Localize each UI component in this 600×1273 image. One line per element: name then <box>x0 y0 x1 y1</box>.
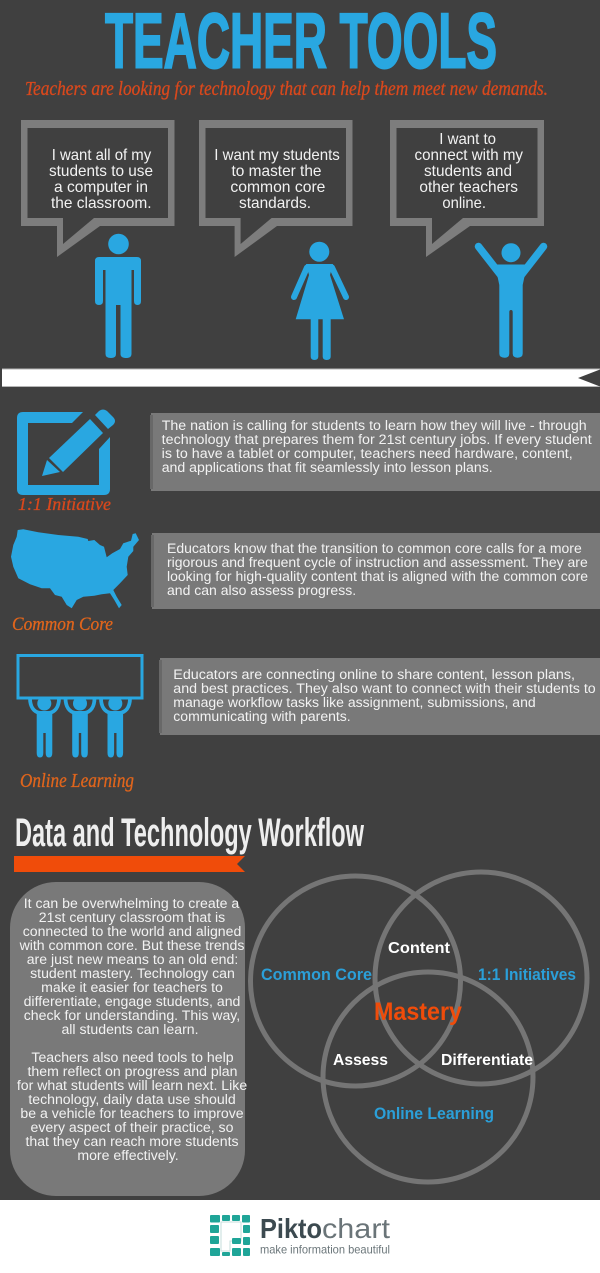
text panel: communicating with parents. <box>173 709 351 725</box>
text panel: looking for high-quality content that is aligned with the common core <box>167 568 588 584</box>
white ribbon divider <box>2 368 600 387</box>
panel: workflow text: with common core. But these trends <box>19 937 244 953</box>
speech bubble 3: other teachers <box>419 179 518 196</box>
panel: online learning <box>18 656 600 792</box>
panel: workflow text: connected to the world and aligned <box>23 923 241 939</box>
speech bubble 1: I want all of my <box>52 147 151 164</box>
text panel: Educators know that the transition to common core calls for a more <box>167 540 582 556</box>
text panel: The nation is calling for students to learn how they will live - through <box>162 418 587 434</box>
venn label: common core: Common Core <box>261 965 372 984</box>
speech bubble 2 <box>199 120 352 257</box>
text panel: and can also assess progress. <box>167 582 356 598</box>
section heading: Data and Technology Workflow <box>15 811 365 855</box>
panel: workflow text: them reflect on progress and plan <box>28 1063 237 1079</box>
label: Online Learning <box>20 770 134 792</box>
label: Common Core <box>12 614 113 635</box>
text panel <box>159 658 600 735</box>
panel: workflow text: every aspect of their practice, so <box>31 1119 234 1135</box>
icon: map of the United States <box>11 529 139 608</box>
text panel: technology that prepares them for 21st century jobs. If every student <box>162 432 592 448</box>
icon: three people holding a board <box>18 656 142 758</box>
panel: workflow text: check for understanding. This way, <box>24 1007 240 1023</box>
text panel: Educators are connecting online to share content, lesson plans, <box>173 667 575 683</box>
orange ribbon <box>14 856 245 872</box>
text panel: rigorous and frequent cycle of instruction and assessment. They are <box>167 554 588 570</box>
speech bubble 3: students and <box>424 163 512 180</box>
icon: man <box>95 234 141 358</box>
text panel: manage workflow tasks like assignment, submissions, and <box>173 695 536 711</box>
wordmark: Pikto <box>260 1213 322 1244</box>
icon: person with raised arms <box>478 243 544 358</box>
panel: 1:1 initiative <box>17 410 600 514</box>
venn label: differentiate: Differentiate <box>441 1052 533 1069</box>
wordmark: chart <box>322 1213 390 1244</box>
speech bubble 2: to master the <box>232 163 322 180</box>
speech bubble 2: standards. <box>239 195 311 212</box>
venn label: mastery: Mastery <box>374 998 462 1026</box>
speech bubble 3: online. <box>442 195 486 212</box>
panel: workflow text: be a vehicle for teachers to improve <box>20 1105 244 1121</box>
icon: pencil and pad <box>17 410 115 495</box>
panel: common core <box>11 529 600 635</box>
panel: workflow text: more effectively. <box>77 1147 179 1163</box>
speech bubble 1: a computer in <box>54 179 148 196</box>
panel: workflow text: make it easier for teachers to <box>41 979 223 995</box>
panel: workflow text: for what students will learn next. Like <box>17 1077 247 1093</box>
icon: woman <box>294 242 346 360</box>
panel: workflow text: student mastery. Technology can <box>30 965 235 981</box>
venn label: assess: Assess <box>333 1052 388 1069</box>
venn label: content: Content <box>388 940 451 957</box>
panel: workflow text: 21st century classroom that is <box>39 909 225 925</box>
panel: teacher quotes <box>21 120 544 360</box>
text panel <box>151 533 600 609</box>
speech bubble 1: students to use <box>49 163 153 180</box>
panel: workflow text: all students can learn. <box>61 1021 199 1037</box>
panel: workflow text: It can be overwhelming to create a <box>24 895 239 911</box>
venn diagram <box>250 872 587 1182</box>
footer: Piktochart logo <box>210 1213 390 1256</box>
speech bubble 1: the classroom. <box>51 195 152 212</box>
panel: workflow text: technology, daily data use should <box>28 1091 236 1107</box>
speech bubble 1 <box>21 120 174 257</box>
wordmark <box>260 1213 390 1244</box>
speech bubble 2: common core <box>230 179 325 196</box>
venn label: 1:1 initiatives: 1:1 Initiatives <box>478 965 576 984</box>
panel: workflow text <box>10 882 247 1196</box>
panel: workflow text: Teachers also need tools to help <box>31 1049 234 1065</box>
panel: workflow text: that they can reach more students <box>25 1133 239 1149</box>
text panel: and best practices. They also want to connect with their students to <box>173 681 596 697</box>
text panel <box>150 413 600 491</box>
label: 1:1 Initiative <box>18 494 111 514</box>
speech bubble 3 <box>390 120 544 257</box>
tagline: make information beautiful <box>260 1242 390 1256</box>
speech bubble 2: I want my students <box>214 147 340 164</box>
icon: logo mark <box>210 1215 250 1256</box>
speech bubble 3: connect with my <box>414 147 523 164</box>
panel: workflow text: differentiate, engage students, and <box>24 993 240 1009</box>
speech bubble 3: I want to <box>439 131 496 148</box>
venn label: online learning: Online Learning <box>374 1104 494 1123</box>
text panel: is to have a tablet or computer, teachers need hardware, content, <box>162 446 573 462</box>
panel: workflow text: are just new means to an old end: <box>27 951 238 967</box>
text panel: and applications that fit seamlessly into lesson plans. <box>162 460 493 476</box>
